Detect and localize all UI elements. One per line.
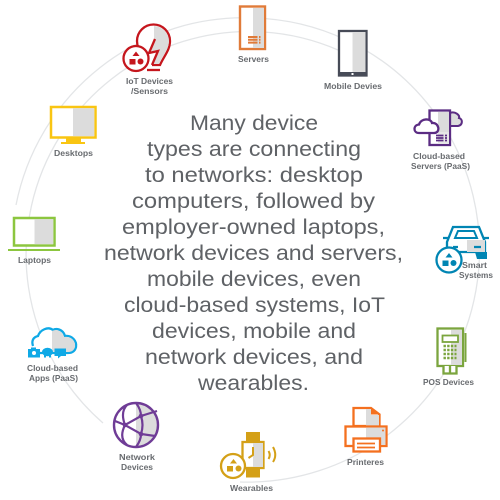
icon: server with clouds (414, 110, 462, 145)
central text block: Many device (190, 112, 318, 135)
icon: car with shapes badge (436, 227, 489, 272)
central text block: network devices and servers, (104, 242, 403, 265)
label: IoT Devices /Sensors: /Sensors (131, 86, 168, 96)
label: POS Devices: POS Devices (423, 377, 474, 387)
label: Cloud-based Servers (PaaS): Servers (PaaS) (411, 161, 470, 171)
label: Smart Systems: Systems (459, 270, 493, 280)
label: Cloud-based Apps (PaaS) (27, 363, 78, 383)
icon: smartphone (339, 31, 366, 76)
label: Cloud-based Apps (PaaS): Apps (PaaS) (29, 373, 78, 383)
central text block: mobile devices, even (147, 268, 361, 291)
label: Mobile Devies: Mobile Devies (324, 81, 382, 91)
icon: light bulb with shapes badge (124, 24, 170, 71)
device: POS Devices (423, 328, 474, 387)
device: Servers (238, 6, 269, 64)
device: IoT Devices / Sensors (124, 24, 173, 96)
label: Desktops: Desktops (54, 148, 93, 158)
icon: server tower (240, 6, 265, 49)
device: Wearables (221, 432, 275, 493)
label: Laptops: Laptops (18, 255, 51, 265)
central text block: to networks: desktop (145, 164, 363, 187)
central text block: types are connecting (147, 138, 361, 161)
icon: laptop (8, 218, 60, 251)
central text block: computers, followed by (132, 190, 376, 213)
device: Smart Systems (436, 227, 493, 280)
icon: cloud with app glyphs (28, 328, 76, 358)
label: Network Devices (119, 452, 155, 472)
central text block: employer-owned laptops, (122, 216, 385, 239)
device: Desktops (51, 107, 96, 158)
device: Network Devices (114, 403, 158, 472)
label: IoT Devices /Sensors: IoT Devices (126, 76, 173, 86)
device: Printers (346, 408, 386, 467)
label: Cloud-based Apps (PaaS): Cloud-based (27, 363, 78, 373)
label: Cloud-based Servers (PaaS): Cloud-based (413, 151, 465, 161)
icon: payment terminal (438, 328, 466, 374)
central text block: cloud-based systems, IoT (124, 294, 385, 317)
icon: smartwatch with shapes badge (221, 432, 275, 478)
label: Network Devices: Devices (121, 462, 153, 472)
label: Printeres: Printeres (347, 457, 384, 467)
label: IoT Devices /Sensors (126, 76, 173, 96)
central text block (104, 112, 403, 395)
label: Servers: Servers (238, 54, 269, 64)
icon: network globe (114, 403, 158, 447)
central text block: wearables. (197, 372, 309, 395)
label: Network Devices: Network (119, 452, 155, 462)
icon: desktop monitor (51, 107, 96, 144)
icon: printer (346, 408, 386, 452)
device: Cloud-based Apps (27, 328, 78, 383)
label: Cloud-based Servers (PaaS) (411, 151, 470, 171)
label: Smart Systems (459, 260, 493, 280)
label: Wearables: Wearables (230, 483, 273, 493)
central text block: network devices, and (145, 346, 363, 369)
device: Cloud-based Servers (411, 110, 470, 171)
device: Laptops (8, 218, 60, 265)
central text block: devices, mobile and (152, 320, 356, 343)
label: Smart Systems: Smart (462, 260, 487, 270)
device: Mobile Devices (324, 31, 382, 91)
